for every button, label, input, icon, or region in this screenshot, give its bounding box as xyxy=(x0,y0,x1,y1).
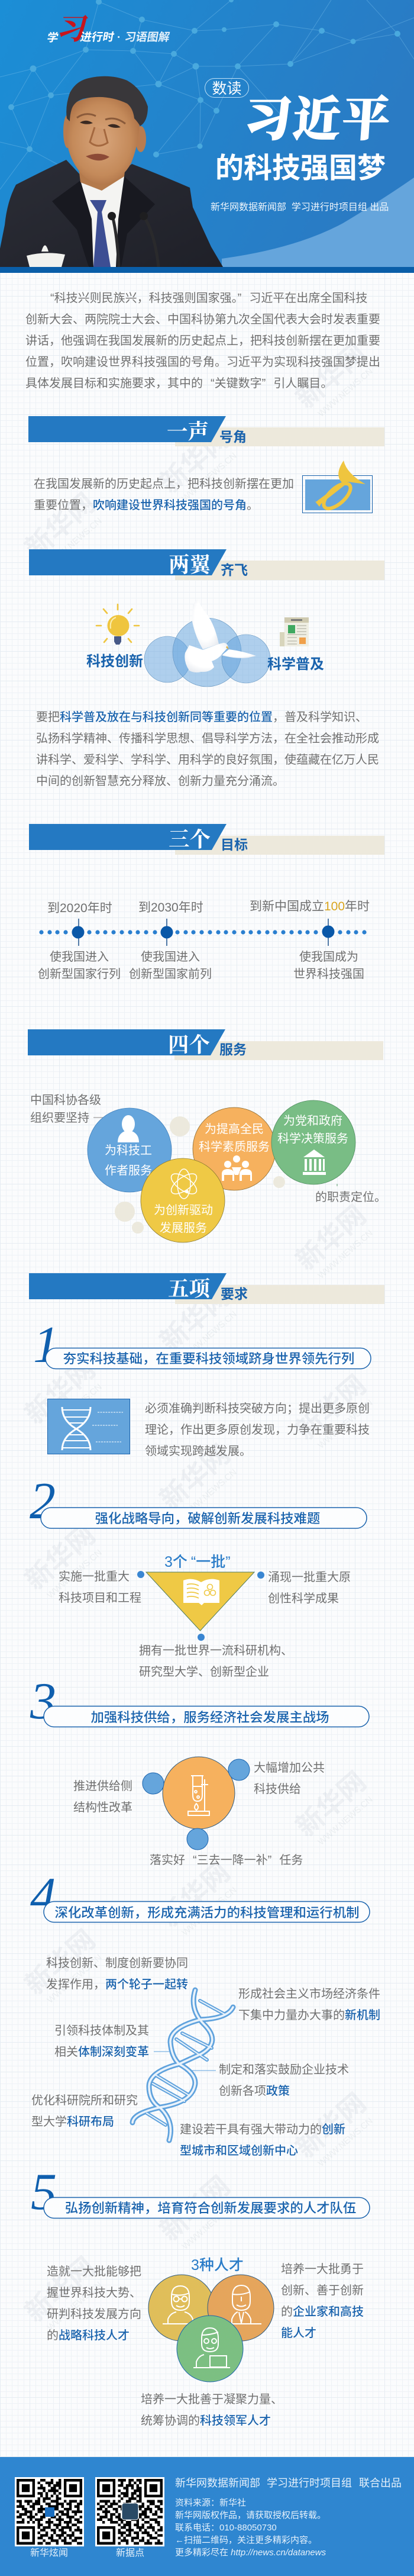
watermarks: WWW.NEWS.CN xyxy=(316,1228,375,1281)
text xyxy=(145,1402,370,1458)
numeral 3: 3 xyxy=(30,1673,56,1730)
icon: open book xyxy=(183,1579,219,1605)
label: 科技创新: 科技创新 xyxy=(86,653,143,669)
text: system reform xyxy=(54,2024,169,2059)
numeral 4: 4 xyxy=(30,1867,56,1925)
intro paragraph: “科技兴则民族兴，科技强则国家强。” 习近平在出席全国科技 xyxy=(50,291,367,305)
text right: 涌现一批重大原 xyxy=(268,1570,351,1584)
text: research layout: 型大学科研布局 xyxy=(31,2115,114,2129)
text: new mechanism: 形成社会主义市场经济条件 xyxy=(238,1987,380,2001)
badge: 数读 xyxy=(205,78,248,97)
label: 科学普及: 科学普及 xyxy=(267,656,324,672)
text left: 握世界科技大势、 xyxy=(47,2286,141,2300)
text left: 推进供给侧 xyxy=(73,1779,132,1793)
timeline xyxy=(38,900,370,981)
intro text line 2: 组织要坚持 xyxy=(30,1111,89,1125)
QR code: 新华炫闻 xyxy=(15,2477,84,2546)
byline: 新华网数据新闻部 学习进行时项目组 出品 xyxy=(211,202,389,212)
milestone: 2030: 到2030年时 xyxy=(138,901,203,915)
bubble: government xyxy=(271,1100,355,1184)
watermarks: WWW.NEWS.CN xyxy=(316,2116,375,2169)
badge: 数读: 数读 xyxy=(212,80,242,97)
text bottom: 拥有一批世界一流科研机构、 xyxy=(139,1644,293,1657)
dotted line xyxy=(39,930,367,935)
text bottom: 研究型大学、创新型企业 xyxy=(139,1665,269,1679)
requirement 4 heading: 深化改革创新，形成充满活力的科技管理和运行机制 xyxy=(55,1905,359,1920)
milestone: 2020 xyxy=(38,901,121,981)
requirement 5 diagram xyxy=(47,2257,364,2427)
text: new mechanism: 下集中力量办大事的新机制 xyxy=(238,2008,380,2022)
tie xyxy=(90,200,111,267)
pill xyxy=(41,1508,367,1528)
text: two wheels: 发挥作用，两个轮子一起转 xyxy=(46,1978,188,1991)
watermarks: 新华网 xyxy=(19,1924,101,2001)
pill xyxy=(44,2197,370,2218)
section 2 text xyxy=(36,710,379,788)
text left xyxy=(59,1570,141,1605)
text: innovation cities: 型城市和区域创新中心 xyxy=(180,2144,298,2158)
requirement 4 heading xyxy=(30,1867,370,1925)
diagram: two wings xyxy=(86,599,324,687)
connector xyxy=(337,1184,338,1186)
credits: 联合出品 xyxy=(359,2477,402,2489)
watermarks: 新华网 xyxy=(19,2251,101,2328)
credits: 学习进行时项目组 xyxy=(267,2477,352,2489)
footer xyxy=(0,2457,414,2576)
icon: newspaper xyxy=(280,617,309,646)
shirt xyxy=(80,176,124,267)
logo: 习语图解 xyxy=(124,31,171,44)
text right: 创新、善于创新 xyxy=(281,2284,364,2297)
text right: 培养一大批勇于 xyxy=(281,2262,364,2276)
bubble: government: 为党和政府 xyxy=(283,1114,342,1128)
milestone: 100 years: 使我国成为 xyxy=(299,950,358,964)
text: 必须准确判断科技突破方向；提出更多原创 xyxy=(145,1402,370,1415)
section heading: 一声号角: 号角 xyxy=(219,429,247,445)
circle: yellow person xyxy=(148,2275,215,2341)
watermarks: WWW.NEWS.CN xyxy=(316,1398,375,1451)
requirement 2 heading: 强化战略导向，破解创新发展科技难题 xyxy=(95,1511,320,1526)
neck xyxy=(78,157,127,191)
text right xyxy=(281,2262,364,2340)
intro paragraph: 具体发展目标和实施要求，其中的 “关键数字” 引人瞩目。 xyxy=(25,376,332,390)
requirement 3 heading: 加强科技供给，服务经济社会发展主战场 xyxy=(90,1710,329,1725)
milestone: 2020: 使我国进入 xyxy=(50,950,109,964)
numeral 5: 5 xyxy=(31,2163,57,2221)
section heading: 五项要求: 要求 xyxy=(221,1286,248,1302)
watermarks: 新华网 xyxy=(290,337,372,414)
logo: 习 xyxy=(54,12,90,46)
watermarks: 新华网 xyxy=(290,1369,372,1446)
text right xyxy=(254,1761,325,1796)
text: system reform: 引领科技体制及其 xyxy=(54,2024,149,2037)
hair xyxy=(66,76,148,126)
milestone: 100 years: 世界科技强国 xyxy=(293,967,364,981)
source notes: 更多精彩尽在 http://news.cn/datanews xyxy=(175,2548,326,2558)
section 2 text: 中间的创新智慧充分释放、创新力量充分涌流。 xyxy=(36,774,284,788)
numeral 1: 1 xyxy=(33,1316,59,1374)
text left: 的战略科技人才 xyxy=(47,2329,130,2342)
logo: 进行时 xyxy=(79,31,115,44)
watermarks: 新华网 xyxy=(19,487,101,564)
section heading: 五项要求: 五项 xyxy=(168,1277,212,1300)
label: 3个一批: 3个“一批” xyxy=(164,1554,231,1570)
text bottom xyxy=(141,2393,283,2427)
text: innovation cities xyxy=(180,2123,345,2158)
credits xyxy=(175,2477,402,2489)
bubble: innovation: 为创新驱动 xyxy=(154,1203,213,1217)
watermarks: WWW.NEWS.CN xyxy=(180,451,239,504)
ears xyxy=(63,115,72,148)
eyes xyxy=(80,121,93,124)
section 2 text: 弘扬科学精神、传播科学思想、倡导科学方法，在全社会推动形成 xyxy=(36,732,379,745)
milestone: 2030: 使我国进入 xyxy=(141,950,200,964)
watermarks: WWW.NEWS.CN xyxy=(46,516,104,569)
source notes xyxy=(175,2498,326,2558)
milestone: 100 years xyxy=(250,900,370,981)
caption: 新据点: 新据点 xyxy=(116,2548,144,2558)
logo: 学 xyxy=(46,31,60,44)
watermarks: WWW.NEWS.CN xyxy=(316,1795,375,1847)
text left: 实施一批重大 xyxy=(59,1570,130,1583)
section 2 text: 要把科学普及放在与科技创新同等重要的位置，普及科学知识、 xyxy=(36,710,367,724)
text right: 能人才 xyxy=(281,2326,316,2340)
requirement 1 heading xyxy=(33,1316,371,1374)
watermarks: 新华网 xyxy=(154,1438,236,1515)
section heading: 一声号角 xyxy=(28,416,384,446)
bubble: scientists: 为科技工 xyxy=(105,1144,152,1157)
text left: 科技项目和工程 xyxy=(59,1591,141,1605)
suit xyxy=(0,160,223,267)
text: policy xyxy=(192,2063,349,2098)
section heading: 三个目标: 目标 xyxy=(221,837,248,852)
teacup xyxy=(27,253,65,267)
icon: test tube xyxy=(188,1776,209,1815)
pill xyxy=(44,1901,370,1923)
watermarks: WWW.NEWS.CN xyxy=(180,1309,239,1362)
section 2 text: 讲科学、爱科学、学科学、用科学的良好氛围，使蕴藏在亿万人民 xyxy=(36,753,379,767)
microphones xyxy=(112,216,159,267)
milestone: 2030: 创新型国家前列 xyxy=(129,967,212,981)
DNA helix xyxy=(132,1990,233,2140)
text right: 的企业家和高技 xyxy=(281,2305,364,2319)
text left: 结构性改革 xyxy=(73,1801,132,1814)
milestone: 100 years: 到新中国成立100年时 xyxy=(250,900,370,913)
text right: 大幅增加公共 xyxy=(254,1761,325,1775)
logo: · xyxy=(117,31,121,44)
source notes: ←扫描二维码，关注更多精彩内容。 xyxy=(175,2535,317,2545)
triangle xyxy=(146,1572,254,1631)
bubble: scientists: 作者服务 xyxy=(105,1164,152,1177)
text: policy: 创新各项政策 xyxy=(219,2084,290,2098)
section 1 text: 重要位置，吹响建设世界科技强国的号角。 xyxy=(34,498,258,512)
watermarks: 新华网 xyxy=(154,422,236,499)
section heading: 两翼齐飞: 两翼 xyxy=(169,553,213,577)
watermarks: WWW.NEWS.CN xyxy=(46,1953,104,2005)
bubble: public xyxy=(193,1107,276,1190)
watermarks: WWW.NEWS.CN xyxy=(316,366,375,419)
central circle xyxy=(163,1757,235,1829)
intro paragraph xyxy=(25,291,380,390)
text bottom: 落实好 “三去一降一补” 任务 xyxy=(150,1853,303,1867)
requirement 5 heading: 弘扬创新精神，培育符合创新发展要求的人才队伍 xyxy=(65,2201,356,2216)
watermarks: WWW.NEWS.CN xyxy=(180,1885,239,1938)
title: 习近平: 习近平 xyxy=(242,94,393,146)
requirement 1 heading: 夯实科技基础，在重要科技领域跻身世界领先行列 xyxy=(63,1351,354,1366)
text bottom xyxy=(139,1644,293,1679)
credits: 新华网数据新闻部 xyxy=(175,2477,260,2489)
section heading: 四个服务 xyxy=(28,1029,383,1060)
text left: 造就一大批能够把 xyxy=(47,2265,141,2278)
watermarks: WWW.NEWS.CN xyxy=(180,2199,239,2252)
text right: 创性科学成果 xyxy=(268,1592,339,1605)
circles xyxy=(144,618,270,687)
logo xyxy=(46,12,171,46)
requirement 3 heading xyxy=(30,1673,369,1730)
watermarks: 新华网 xyxy=(154,2170,236,2247)
watermarks: 新华网 xyxy=(19,1353,101,1430)
section heading: 两翼齐飞 xyxy=(29,549,384,580)
section heading: 四个服务: 服务 xyxy=(219,1042,247,1057)
watermarks: 新华网 xyxy=(290,1766,372,1843)
requirement 5 heading xyxy=(31,2163,370,2221)
text left xyxy=(73,1779,132,1814)
watermarks: 新华网 xyxy=(290,2087,372,2164)
requirement 2 diagram xyxy=(59,1554,351,1679)
circle: orange person xyxy=(208,2275,274,2341)
requirement 3 diagram xyxy=(73,1757,325,1867)
lighter curved corner xyxy=(222,178,414,267)
milestone: 2020: 到2020年时 xyxy=(47,901,112,915)
text: new mechanism xyxy=(238,1987,380,2022)
watermarks: 新华网 xyxy=(19,1519,101,1596)
bubble: government: 科学决策服务 xyxy=(277,1132,348,1145)
text: two wheels: 科技创新、制度创新要协同 xyxy=(46,1956,188,1970)
text: 理论，作出更多原创发现，力争在重要科技 xyxy=(145,1423,370,1437)
intro text: 中国科协各级 xyxy=(30,1093,101,1107)
text left: 研判科技发展方向 xyxy=(47,2307,141,2321)
section heading: 一声号角: 一声 xyxy=(167,420,209,443)
source notes: 联系电话：010-88050730 xyxy=(175,2523,277,2533)
bubble: public: 为提高全民 xyxy=(205,1122,264,1136)
watermarks: WWW.NEWS.CN xyxy=(180,1467,239,1520)
text: innovation cities: 建设若干具有强大带动力的创新 xyxy=(180,2123,345,2136)
section heading: 五项要求 xyxy=(29,1273,384,1304)
text: research layout: 优化科研院所和研究 xyxy=(31,2094,138,2107)
icon: DNA card xyxy=(47,1399,130,1454)
watermarks: 新华网 xyxy=(154,1280,236,1357)
watermarks xyxy=(19,337,380,2337)
label: 3种人才: 3种人才 xyxy=(191,2257,244,2274)
section heading: 三个目标 xyxy=(29,824,384,855)
lapels xyxy=(52,181,93,267)
intro paragraph: 讲话，他强调在我国发展新的历史起点上，把科技创新摆在更加重要 xyxy=(25,334,380,347)
section heading: 两翼齐飞: 齐飞 xyxy=(221,562,248,578)
nose and mouth xyxy=(90,127,108,146)
watermarks: 新华网 xyxy=(154,1856,236,1933)
pill xyxy=(44,1706,369,1727)
text: two wheels xyxy=(46,1956,188,1991)
watermarks: 新华网 xyxy=(290,1199,372,1276)
text right xyxy=(268,1570,351,1605)
closing text: 的职责定位。 xyxy=(315,1190,386,1204)
title: 的科技强国梦: 的科技强国梦 xyxy=(215,153,386,184)
intro paragraph: 创新大会、两院院士大会、中国科协第九次全国代表大会时发表重要 xyxy=(25,313,380,326)
icon: light bulb xyxy=(96,604,139,645)
QR code: 新据点 xyxy=(95,2477,164,2546)
requirement 1 body xyxy=(47,1399,370,1458)
numeral 2: 2 xyxy=(30,1473,56,1530)
bubble: scientists xyxy=(88,1108,172,1192)
text bottom: 统筹协调的科技领军人才 xyxy=(141,2414,271,2427)
watermarks: WWW.NEWS.CN xyxy=(46,1548,104,1601)
text left xyxy=(47,2265,141,2342)
network pattern xyxy=(0,0,414,189)
intro paragraph: 位置，吹响建设世界科技强国的号角。习近平为实现科技强国梦提出 xyxy=(25,355,380,369)
requirement 2 heading xyxy=(30,1473,367,1530)
section heading: 四个服务: 四个 xyxy=(168,1033,210,1057)
circle: green person xyxy=(177,2316,243,2382)
small circles xyxy=(143,1759,250,1850)
decorative bubbles xyxy=(115,1116,285,1234)
text right: 科技供给 xyxy=(254,1782,301,1796)
header banner xyxy=(0,0,414,267)
bullet dots xyxy=(137,1571,264,1641)
bubble: innovation: 发展服务 xyxy=(160,1221,207,1235)
text: research layout xyxy=(31,2094,138,2129)
text: policy: 制定和落实鼓励企业技术 xyxy=(219,2063,349,2076)
icon: dove xyxy=(185,599,256,672)
header bottom band xyxy=(0,267,414,273)
milestone: 2030 xyxy=(129,901,212,981)
bubble: public: 科学素质服务 xyxy=(199,1140,270,1154)
milestone: 2020: 创新型国家行列 xyxy=(38,967,121,981)
icon: trumpet xyxy=(303,461,373,513)
watermarks: WWW.NEWS.CN xyxy=(46,1382,104,1435)
text bottom: 培养一大批善于凝聚力量、 xyxy=(141,2393,283,2406)
section 1 text: 在我国发展新的历史起点上，把科技创新摆在更加 xyxy=(34,477,294,491)
bubble: innovation xyxy=(141,1158,225,1242)
watermarks: WWW.NEWS.CN xyxy=(46,2280,104,2333)
source notes: 新华网版权作品，请获取授权后转载。 xyxy=(175,2510,326,2520)
section 1 text xyxy=(34,477,294,512)
source notes: 资料来源：新华社 xyxy=(175,2498,246,2508)
face xyxy=(67,96,140,184)
text: 领域实现跨越发展。 xyxy=(145,1444,251,1458)
section heading: 三个目标: 三个 xyxy=(169,827,211,851)
caption: 新华炫闻: 新华炫闻 xyxy=(30,2548,68,2558)
requirement 4 diagram xyxy=(31,1956,380,2158)
text: system reform: 相关体制深刻变革 xyxy=(54,2045,149,2059)
diagram: four services xyxy=(30,1093,386,1242)
pill xyxy=(46,1348,371,1368)
portrait illustration xyxy=(0,76,223,267)
